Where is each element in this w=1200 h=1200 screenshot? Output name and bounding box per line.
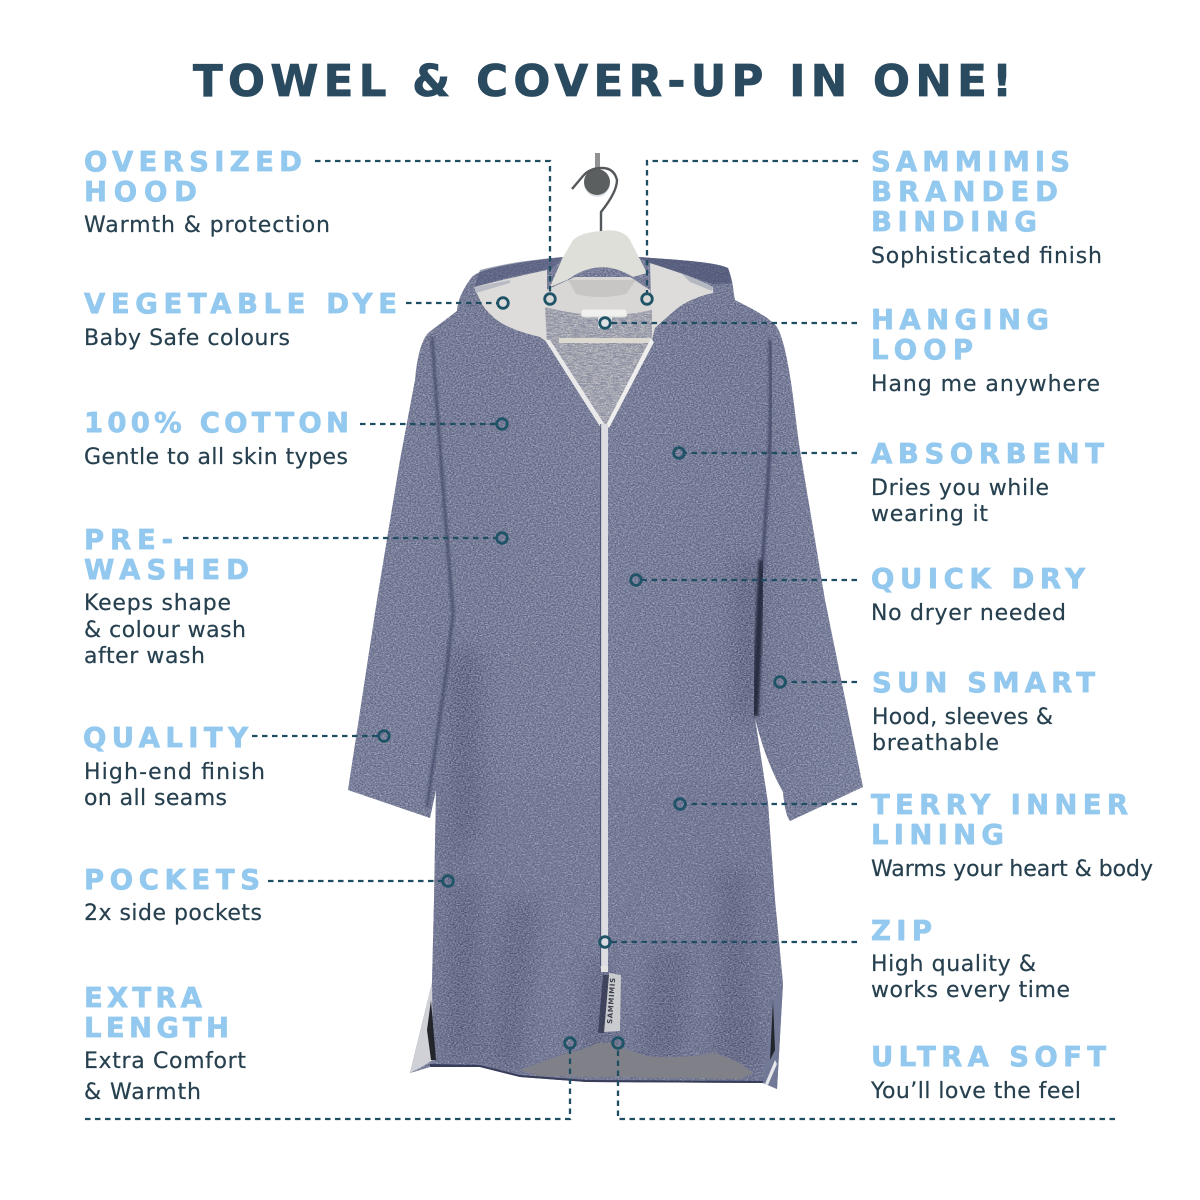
feature: oversized hood: HOOD: [84, 176, 197, 208]
feature: terry inner lining: Warms your heart & body: [871, 857, 1153, 882]
hanging loop: [581, 309, 627, 317]
sleeve seams: [427, 337, 453, 807]
icon: wall hook and hanger: [572, 153, 617, 232]
feature: vegetable dye: VEGETABLE DYE: [84, 288, 397, 320]
feature: pre-washed: WASHED: [84, 554, 249, 586]
feature: sammimis branded binding: BINDING: [871, 206, 1037, 238]
title: TOWEL & COVER-UP IN ONE!: [193, 57, 1012, 107]
fold shading: [445, 560, 760, 1070]
feature: oversized hood: Warmth & protection: [84, 213, 330, 238]
inner terry at back neck: [545, 277, 652, 315]
neck interior: [545, 307, 652, 428]
feature: vegetable dye: Baby Safe colours: [84, 326, 290, 351]
hood interior: [474, 270, 547, 342]
hood shadow band: [474, 257, 563, 287]
inside hem lining: [520, 1043, 753, 1079]
feature: ultra soft: [870, 1041, 1106, 1104]
feature: extra length: & Warmth: [84, 1080, 201, 1105]
feature: pockets: [84, 864, 262, 926]
feature: quick dry: QUICK DRY: [871, 563, 1086, 595]
feature: zip: High quality &: [871, 952, 1036, 977]
feature: pre-washed: Keeps shape: [84, 591, 231, 616]
feature: 100% cotton: Gentle to all skin types: [84, 445, 348, 470]
feature: absorbent: ABSORBENT: [871, 438, 1104, 470]
feature: sun smart: [872, 667, 1095, 756]
feature: pockets: 2x side pockets: [84, 901, 262, 926]
feature: extra length: EXTRA: [84, 982, 203, 1014]
feature: vegetable dye: [84, 288, 397, 351]
feature: sammimis branded binding: BRANDED: [871, 176, 1058, 208]
feature: zip: works every time: [871, 978, 1070, 1003]
feature: terry inner lining: TERRY INNER: [871, 789, 1128, 821]
garment: hooded zip robe: [340, 230, 870, 1100]
feature: hanging loop: HANGING: [871, 304, 1049, 336]
feature: 100% cotton: [84, 407, 349, 470]
feature: sun smart: SUN SMART: [872, 667, 1095, 699]
feature: pre-washed: after wash: [84, 644, 205, 669]
feature: ultra soft: You’ll love the feel: [870, 1079, 1081, 1104]
feature: quality: High-end finish: [84, 760, 265, 785]
feature: extra length: LENGTH: [84, 1012, 229, 1044]
feature: hanging loop: Hang me anywhere: [871, 372, 1100, 397]
feature: absorbent: [871, 438, 1104, 527]
feature: quality: on all seams: [84, 786, 227, 811]
feature: oversized hood: [84, 146, 330, 238]
feature: sammimis branded binding: SAMMIMIS: [871, 146, 1070, 178]
feature: zip: [871, 915, 1070, 1003]
feature: oversized hood: OVERSIZED: [84, 146, 302, 178]
feature: sun smart: breathable: [872, 731, 999, 756]
feature: hanging loop: [871, 304, 1100, 397]
feature: extra length: [84, 982, 246, 1105]
feature: sun smart: Hood, sleeves &: [872, 705, 1053, 730]
hanger: [550, 230, 647, 287]
feature: sammimis branded binding: [871, 146, 1102, 269]
feature: absorbent: Dries you while: [871, 476, 1049, 501]
feature: zip: ZIP: [871, 915, 932, 947]
feature: absorbent: wearing it: [871, 502, 988, 527]
hood edge labels: [474, 280, 510, 293]
feature: extra length: Extra Comfort: [84, 1049, 246, 1074]
centre zip: [601, 424, 608, 966]
feature: sammimis branded binding: Sophisticated finish: [871, 244, 1102, 269]
leader lines and markers: [85, 161, 1115, 1119]
feature: quality: QUALITY: [83, 722, 249, 754]
feature: hanging loop: LOOP: [871, 334, 973, 366]
side slit right: [763, 983, 783, 1089]
side slit left: [410, 983, 433, 1073]
zip tape at neck: [545, 340, 605, 428]
feature: 100% cotton: 100% COTTON: [84, 407, 349, 439]
feature: terry inner lining: [871, 789, 1153, 882]
brand tag: [604, 973, 621, 1032]
feature: ultra soft: ULTRA SOFT: [871, 1041, 1106, 1073]
garment: hooded zip robe: SAMMIMIS: [606, 978, 617, 1024]
feature: quality: [83, 722, 265, 811]
feature: terry inner lining: LINING: [871, 819, 1004, 851]
feature: quick dry: No dryer needed: [871, 601, 1066, 626]
feature: pockets: POCKETS: [84, 864, 260, 896]
feature: pre-washed: PRE-: [84, 524, 173, 556]
robe shell: [348, 257, 863, 1089]
feature: pre-washed: & colour wash: [84, 618, 246, 643]
fabric texture: [340, 250, 870, 1100]
feature: quick dry: [871, 563, 1086, 626]
feature: pre-washed: [84, 524, 249, 669]
